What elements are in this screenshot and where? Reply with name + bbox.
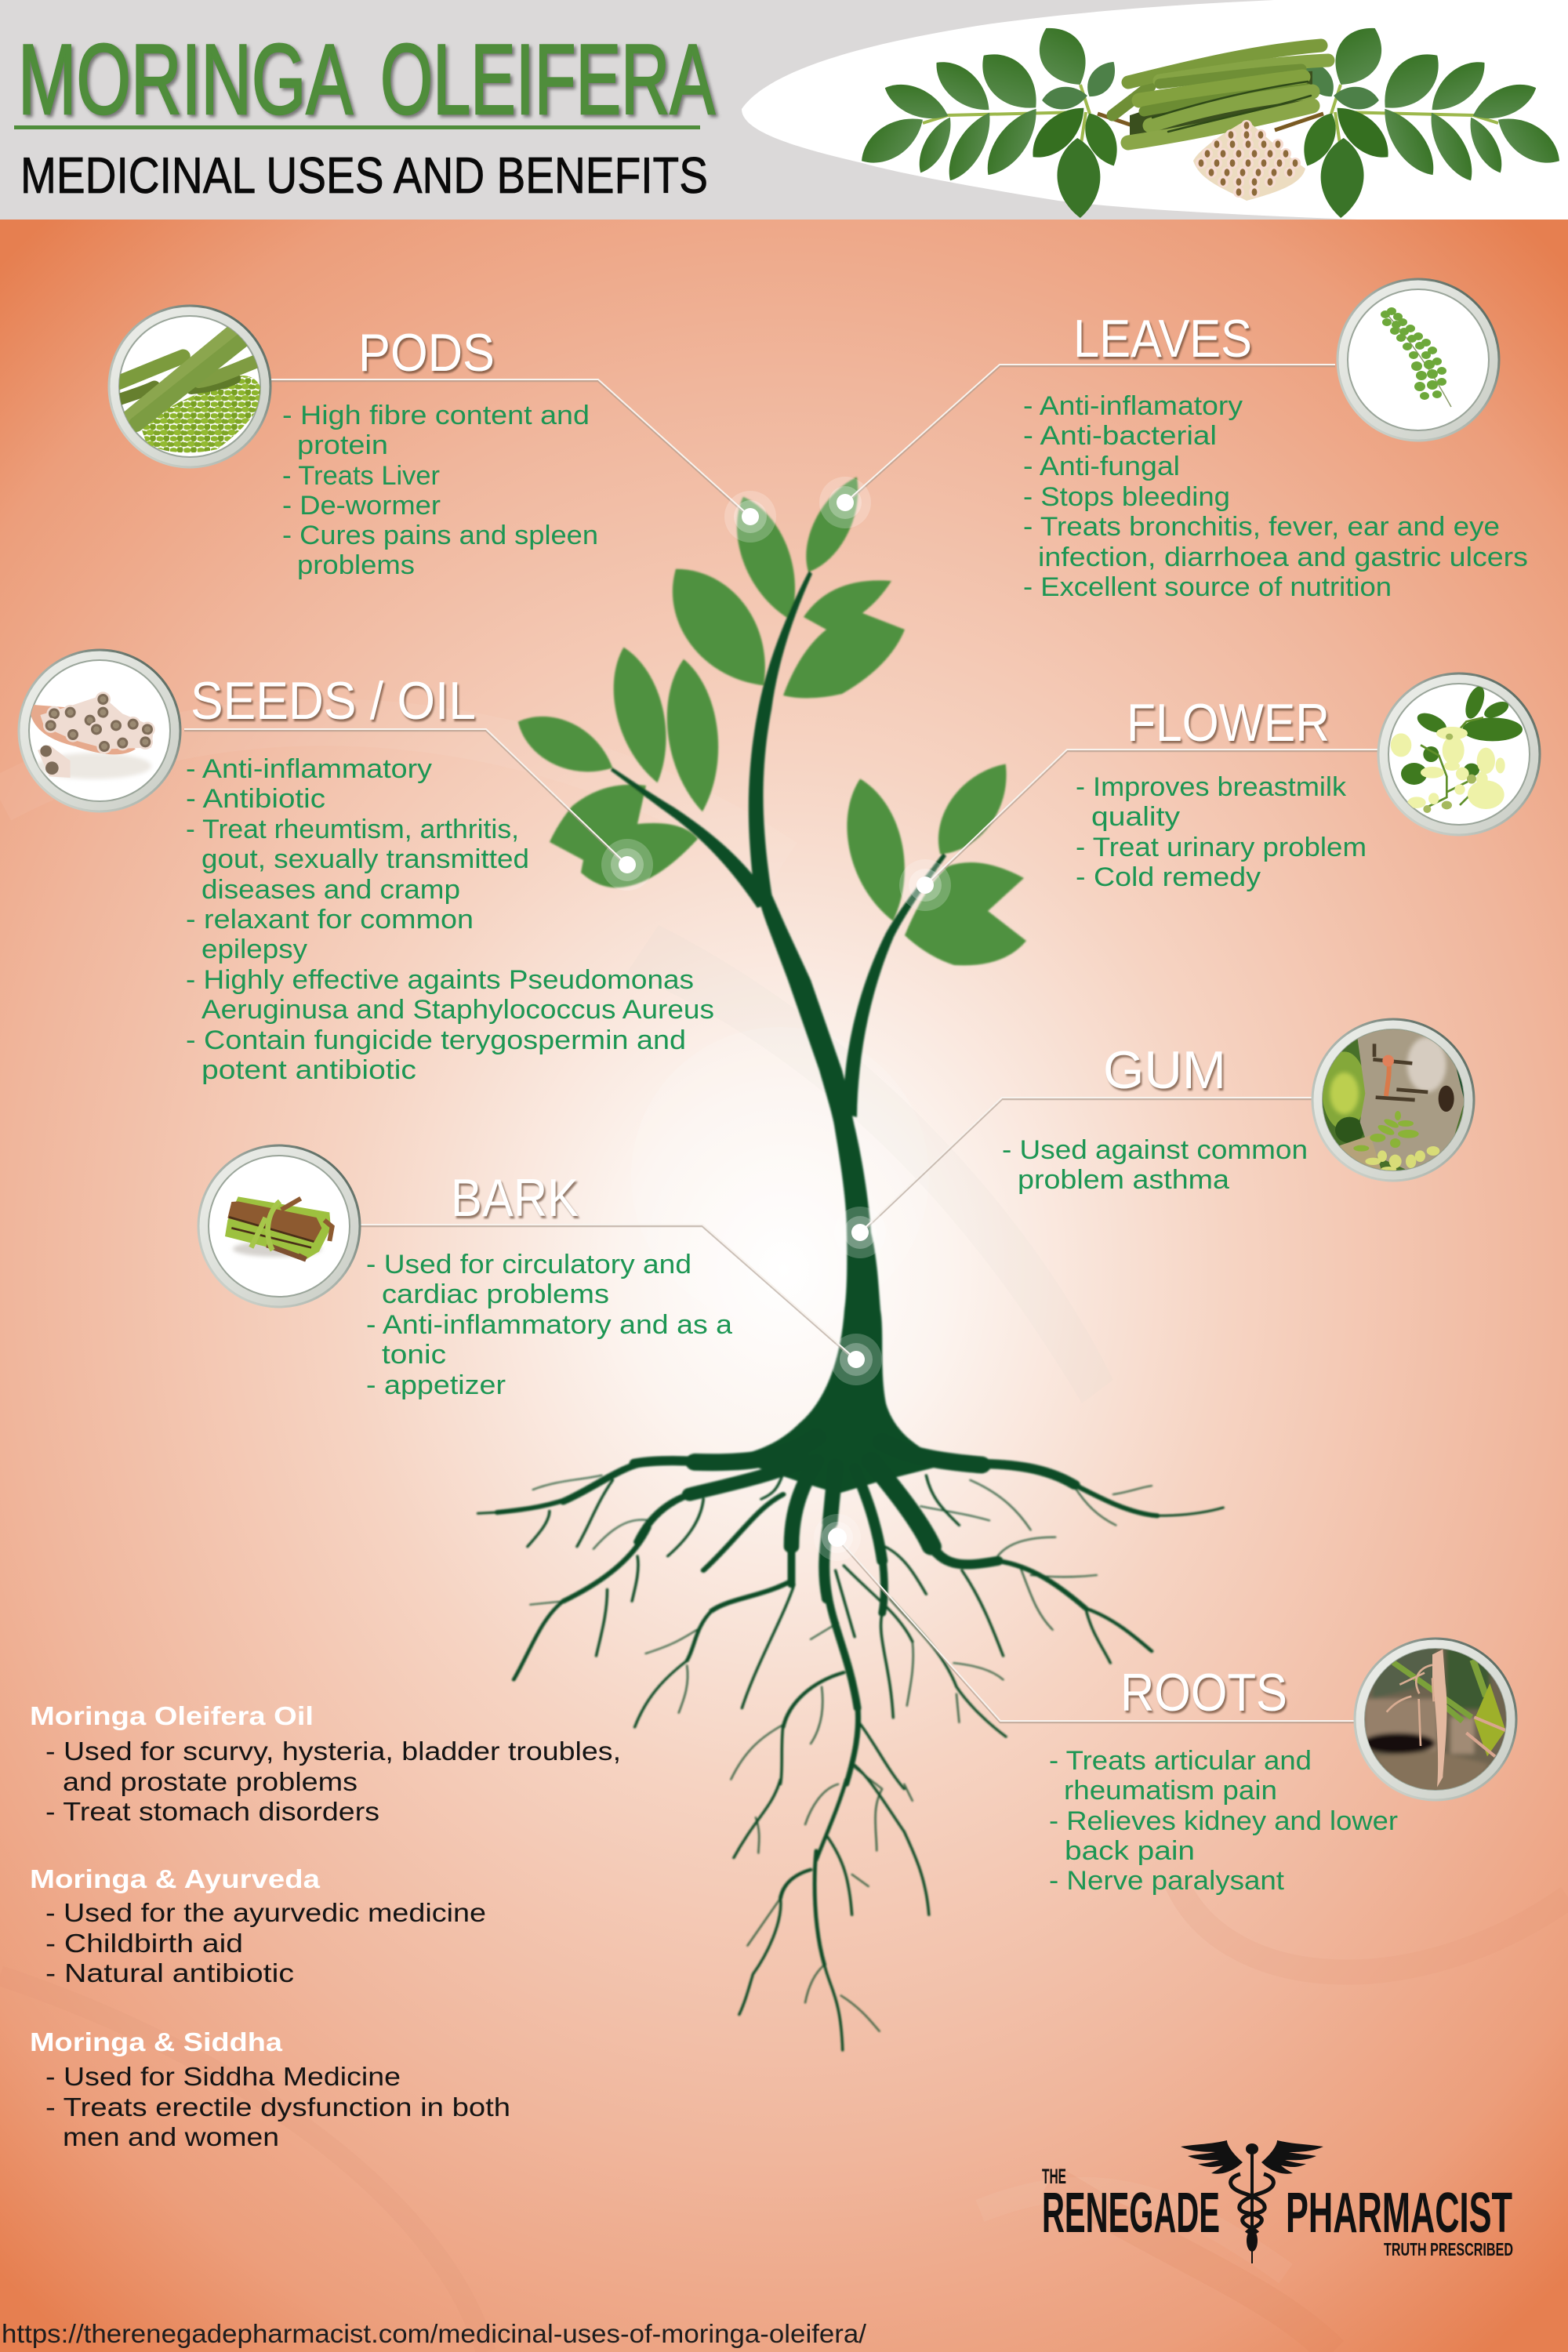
panel: leaves xyxy=(1023,279,1528,602)
icon: flower xyxy=(1378,673,1540,835)
panel: flower xyxy=(1076,673,1540,892)
list: gum: - Used against common xyxy=(1002,1135,1308,1165)
text block: moringa oleifera oil: and prostate problems xyxy=(63,1767,358,1796)
list: pods xyxy=(282,401,598,580)
list: gum: problem asthma xyxy=(1018,1165,1229,1195)
list: roots xyxy=(1049,1746,1398,1896)
list: seeds / oil: - Highly effective againts Pseudomonas xyxy=(186,965,694,995)
logo: the renegade pharmacist xyxy=(1042,2140,1513,2263)
subtitle: MEDICINAL USES AND BENEFITS xyxy=(20,147,708,204)
header band xyxy=(0,0,1568,220)
dot: bark xyxy=(830,1334,882,1385)
heading: flower: FLOWER xyxy=(1127,693,1330,753)
list: bark xyxy=(366,1250,732,1400)
title: OLEIFERA xyxy=(380,24,715,135)
icon: bark xyxy=(198,1145,360,1307)
list: bark: - Anti-inflammatory and as a xyxy=(366,1310,732,1340)
heading: leaves: LEAVES xyxy=(1073,309,1252,368)
roots xyxy=(478,1437,1223,2050)
heading: bark: BARK xyxy=(451,1168,579,1228)
text block: moringa oleifera oil: Moringa Oleifera Oil xyxy=(30,1701,314,1730)
dot: seeds xyxy=(601,839,653,891)
list: bark: tonic xyxy=(382,1340,446,1370)
list: leaves xyxy=(1023,391,1528,602)
dot: gum xyxy=(834,1207,886,1258)
icon: pods xyxy=(109,306,270,467)
list: flower xyxy=(1076,772,1367,892)
icon: leaves xyxy=(1338,279,1499,441)
list: leaves: - Excellent source of nutrition xyxy=(1023,572,1392,602)
list: seeds / oil: - Antibiotic xyxy=(186,784,325,814)
stems and trunk xyxy=(611,571,953,1494)
heading: seeds / oil: SEEDS / OIL xyxy=(191,671,476,731)
text block: moringa and ayurveda: Moringa & Ayurveda xyxy=(30,1864,321,1893)
text block: moringa and ayurveda: - Childbirth aid xyxy=(45,1929,243,1958)
list: leaves: - Anti-inflamatory xyxy=(1023,391,1243,421)
list: leaves: - Treats bronchitis, fever, ear and eye xyxy=(1023,512,1500,542)
list: pods: - Treats Liver xyxy=(282,461,440,491)
list: pods: - Cures pains and spleen xyxy=(282,521,598,550)
list: seeds / oil xyxy=(186,754,714,1085)
heading: gum: GUM xyxy=(1103,1040,1226,1100)
text block: moringa oleifera oil: - Treat stomach disorders xyxy=(45,1797,379,1826)
list: seeds / oil: diseases and cramp xyxy=(201,875,460,905)
list: roots: - Relieves kidney and lower xyxy=(1049,1806,1398,1836)
icon: roots xyxy=(1355,1639,1516,1800)
list: seeds / oil: - Contain fungicide terygospermin and xyxy=(186,1025,686,1055)
icon: seeds xyxy=(19,650,180,811)
title xyxy=(18,24,715,135)
list: seeds / oil: - Treat rheumtism, arthritis, xyxy=(186,815,519,844)
list: leaves: - Anti-bacterial xyxy=(1023,421,1217,451)
text block: moringa and siddha: - Treats erectile dysfunction in both xyxy=(45,2092,510,2122)
left leaf branch xyxy=(853,17,1146,219)
panel: pods xyxy=(109,306,598,580)
dot: leaves xyxy=(819,477,871,528)
text block: moringa and siddha xyxy=(30,2027,510,2151)
list: leaves: infection, diarrhoea and gastric ulcers xyxy=(1038,543,1528,572)
list: bark: cardiac problems xyxy=(382,1279,609,1309)
icon: gum xyxy=(1312,1019,1474,1181)
panel: seeds / oil xyxy=(19,650,714,1085)
list: pods: - De-wormer xyxy=(282,491,441,521)
heading: pods: PODS xyxy=(358,323,495,383)
list: roots: - Treats articular and xyxy=(1049,1746,1312,1776)
list: bark: - appetizer xyxy=(366,1370,506,1400)
list: seeds / oil: gout, sexually transmitted xyxy=(201,844,529,874)
logo: the renegade pharmacist: TRUTH PRESCRIBED xyxy=(1384,2239,1513,2259)
source url: https://therenegadepharmacist.com/medicinal-uses-of-moringa-oleifera/ xyxy=(2,2319,867,2348)
list: seeds / oil: - relaxant for common xyxy=(186,905,474,935)
list: roots: rheumatism pain xyxy=(1064,1776,1277,1806)
list: pods: problems xyxy=(297,550,415,580)
text block: moringa and ayurveda xyxy=(30,1864,486,1987)
list: flower: quality xyxy=(1091,802,1180,832)
list: leaves: - Anti-fungal xyxy=(1023,452,1180,481)
text block: moringa and ayurveda: - Used for the ayurvedic medicine xyxy=(45,1898,486,1927)
header image: moringa leaves, pods and seeds xyxy=(853,17,1568,219)
text block: moringa and ayurveda: - Natural antibiotic xyxy=(45,1958,294,1987)
list: roots: - Nerve paralysant xyxy=(1049,1866,1285,1896)
heading: roots: ROOTS xyxy=(1120,1663,1287,1722)
list: pods: - High fibre content and xyxy=(282,401,590,430)
seeds cluster xyxy=(1193,120,1305,201)
green pods xyxy=(1112,45,1328,145)
list: seeds / oil: - Anti-inflammatory xyxy=(186,754,432,784)
text block: moringa and siddha: - Used for Siddha Medicine xyxy=(45,2062,401,2091)
list: seeds / oil: potent antibiotic xyxy=(201,1055,416,1085)
callout connector lines xyxy=(184,365,1377,1722)
icon: caduceus xyxy=(1181,2140,1323,2263)
text block: moringa and siddha: Moringa & Siddha xyxy=(30,2027,283,2056)
panel: gum xyxy=(1002,1019,1474,1195)
marker dots xyxy=(601,477,951,1561)
logo: the renegade pharmacist: RENEGADE xyxy=(1042,2182,1220,2245)
list: seeds / oil: epilepsy xyxy=(201,935,307,964)
text block: moringa and siddha: men and women xyxy=(63,2122,279,2151)
leaves xyxy=(508,469,1026,965)
list: roots: back pain xyxy=(1065,1836,1195,1866)
dot: pods xyxy=(724,491,776,543)
text block: moringa oleifera oil xyxy=(30,1701,621,1826)
list: bark: - Used for circulatory and xyxy=(366,1250,691,1279)
panel: bark xyxy=(198,1145,732,1400)
list: flower: - Treat urinary problem xyxy=(1076,833,1367,862)
right leaf branch xyxy=(1275,17,1568,219)
list: leaves: - Stops bleeding xyxy=(1023,482,1230,512)
panel: roots xyxy=(1049,1639,1516,1896)
dot: flower xyxy=(899,859,951,911)
dot: roots xyxy=(814,1514,861,1561)
list: pods: protein xyxy=(297,430,388,460)
list: gum xyxy=(1002,1135,1308,1195)
list: flower: - Improves breastmilk xyxy=(1076,772,1347,802)
list: flower: - Cold remedy xyxy=(1076,862,1261,892)
tree xyxy=(478,469,1223,2050)
list: seeds / oil: Aeruginusa and Staphylococcus Aureus xyxy=(201,995,714,1025)
title: MORINGA xyxy=(18,24,353,135)
text block: moringa oleifera oil: - Used for scurvy, hysteria, bladder troubles, xyxy=(45,1737,621,1766)
title underline xyxy=(14,125,700,129)
logo: the renegade pharmacist: THE xyxy=(1042,2165,1066,2188)
